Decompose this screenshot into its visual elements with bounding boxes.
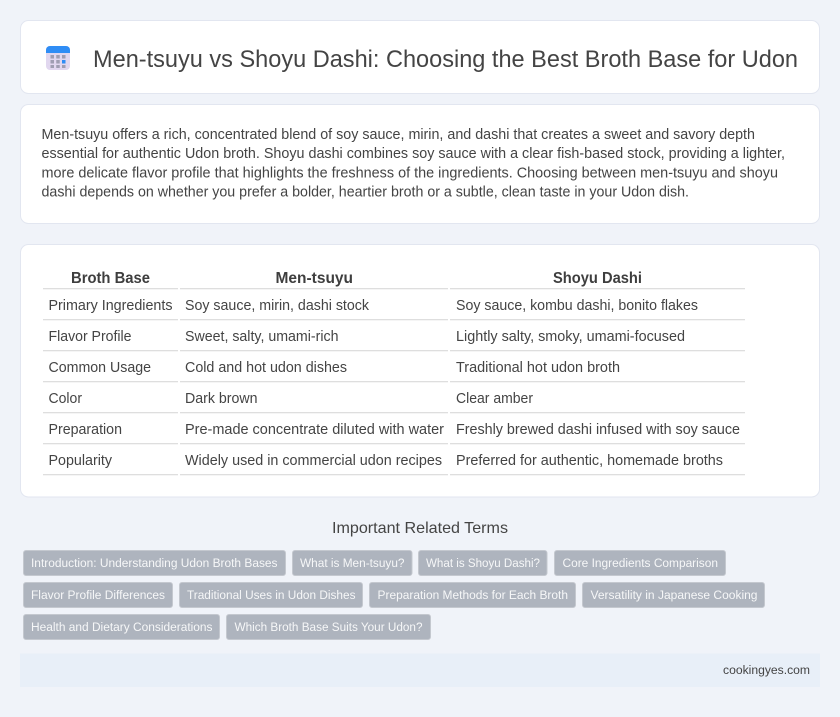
row: flavor profile: Sweet, salty, umami-rich (185, 329, 338, 345)
row: popularity: Preferred for authentic, homemade broths (456, 453, 723, 469)
row: color: Clear amber (456, 391, 533, 407)
row: primary ingredients: Soy sauce, mirin, dashi stock (185, 298, 370, 314)
table header row (71, 270, 642, 287)
panel: intro text: essential for authentic Udon broth. Shoyu dashi combines soy sauce with a clear fish-based stock, providing a lighter, (42, 146, 785, 162)
tag (24, 550, 286, 576)
row: flavor profile (48, 329, 685, 345)
row: popularity: Popularity (48, 453, 113, 469)
tag (226, 614, 430, 640)
tag (418, 550, 547, 576)
panel: intro text: more delicate flavor profile that highlights the freshness of the ingredients. Choosing between men-tsuyu and shoyu (42, 166, 778, 182)
panel: intro text (20, 104, 820, 224)
panel: intro text: Men-tsuyu offers a rich, concentrated blend of soy sauce, mirin, and dashi that creates a sweet and savory depth (42, 127, 755, 143)
tag (370, 582, 576, 608)
row: preparation: Preparation (48, 422, 122, 438)
icon: calendar (46, 46, 70, 70)
table header row: Shoyu Dashi (553, 270, 642, 287)
tag: Flavor Profile Differences (31, 588, 165, 602)
row: primary ingredients: Soy sauce, kombu dashi, bonito flakes (456, 298, 698, 314)
panel: intro text: dashi depends on whether you prefer a bolder, heartier broth or a subtle, clean taste in your Udon dish. (42, 184, 689, 200)
footer (20, 654, 820, 687)
title: Men-tsuyu vs Shoyu Dashi: Choosing the Best Broth Base for Udon (93, 46, 798, 73)
tag (24, 614, 220, 640)
tag: What is Shoyu Dashi? (426, 556, 540, 570)
tag: Introduction: Understanding Udon Broth Bases (31, 556, 278, 570)
related terms tags (24, 550, 764, 640)
tag: Core Ingredients Comparison (562, 556, 718, 570)
row: flavor profile: Flavor Profile (48, 329, 132, 345)
table header row: Broth Base (71, 270, 150, 287)
heading: important related terms: Important Related Terms (332, 520, 508, 537)
row: preparation: Pre-made concentrate diluted with water (185, 422, 444, 438)
tag (24, 582, 172, 608)
tag (582, 582, 764, 608)
row: primary ingredients: Primary Ingredients (48, 298, 172, 314)
row: preparation: Freshly brewed dashi infused with soy sauce (456, 422, 740, 438)
row: flavor profile: Lightly salty, smoky, umami-focused (456, 329, 685, 345)
row: common usage: Cold and hot udon dishes (185, 360, 347, 376)
row: common usage: Common Usage (48, 360, 151, 376)
tag (554, 550, 726, 576)
row: common usage: Traditional hot udon broth (456, 360, 620, 376)
tag: Health and Dietary Considerations (31, 620, 212, 634)
panel: comparison table (20, 244, 820, 497)
tag: Preparation Methods for Each Broth (378, 588, 568, 602)
row: popularity: Widely used in commercial udon recipes (185, 453, 442, 469)
row: color: Dark brown (185, 391, 258, 407)
tag: What is Men-tsuyu? (300, 556, 405, 570)
row: common usage (48, 360, 620, 376)
panel: header (20, 20, 820, 94)
row: color (48, 391, 533, 407)
row: preparation (48, 422, 740, 438)
tag (292, 550, 412, 576)
tag: Which Broth Base Suits Your Udon? (234, 620, 423, 634)
tag (180, 582, 362, 608)
table header row: Men-tsuyu (276, 270, 353, 287)
tag: Versatility in Japanese Cooking (590, 588, 758, 602)
row: primary ingredients (48, 298, 698, 314)
row: color: Color (48, 391, 82, 407)
row: popularity (48, 453, 723, 469)
footer: cookingyes.com (723, 663, 810, 677)
tag: Traditional Uses in Udon Dishes (187, 588, 356, 602)
